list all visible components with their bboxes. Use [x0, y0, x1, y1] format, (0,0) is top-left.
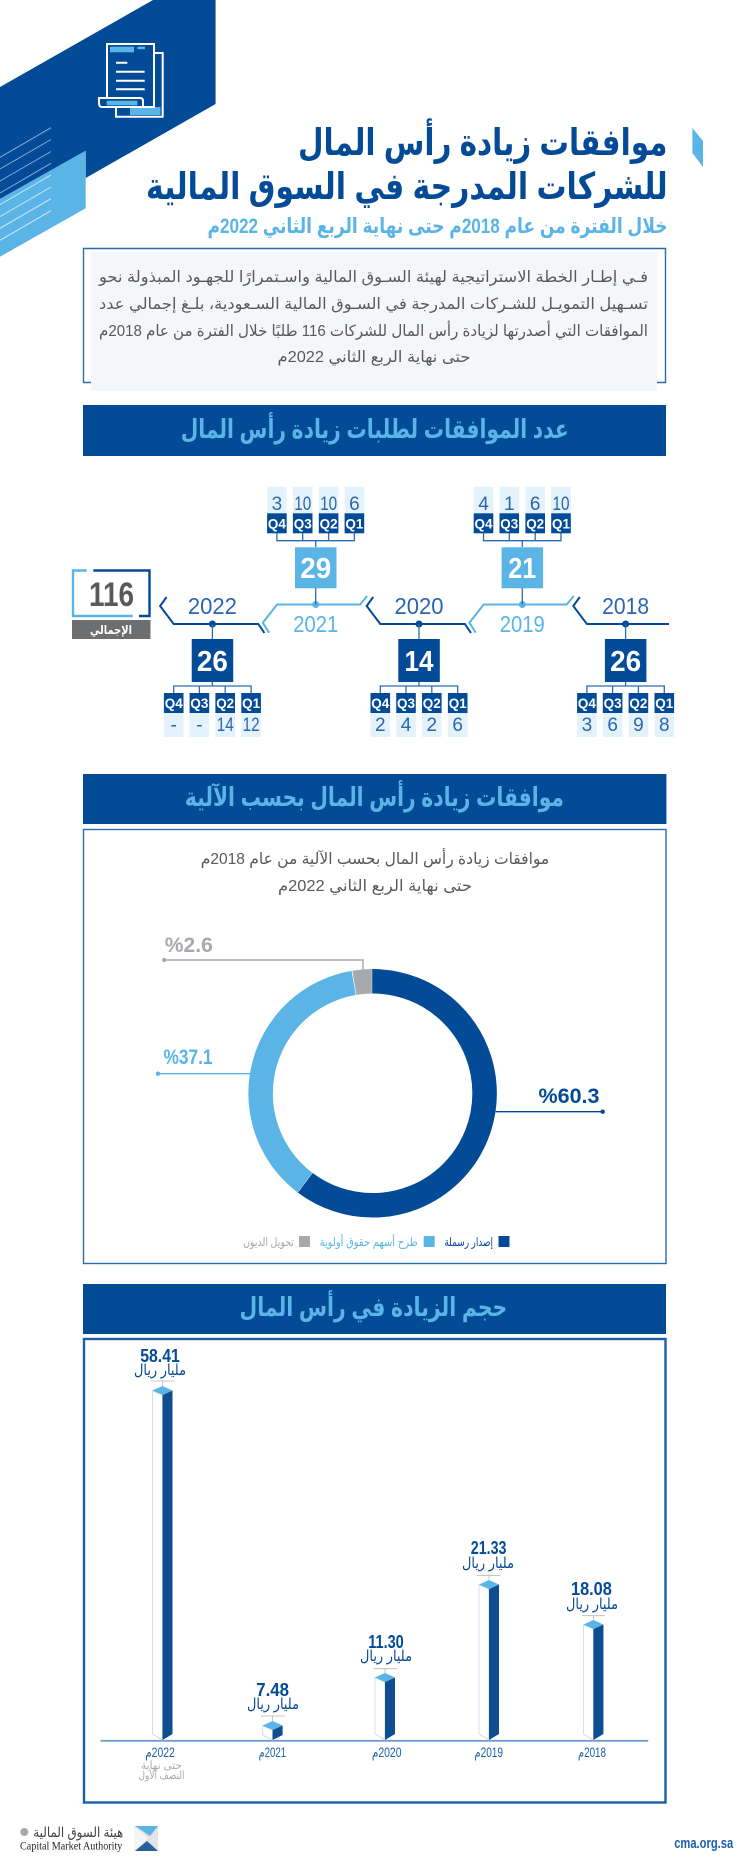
bar 2018	[566, 1579, 618, 1760]
timeline year 2022: Q3	[190, 695, 209, 711]
bar 2020	[360, 1632, 412, 1760]
timeline year 2021: Q3	[294, 516, 312, 532]
panel: intro text: فـي إطـار الخطة الاستراتيجية لهيئة السـوق المالية واسـتمرارًا للجهـود المبذولة نحو	[98, 269, 648, 287]
timeline year 2018: 9	[633, 715, 644, 736]
timeline year 2022: 2022	[188, 593, 237, 619]
panel: intro text: حتى نهاية الربع الثاني 2022م	[278, 349, 470, 367]
timeline year 2019: 1	[504, 494, 515, 515]
timeline year 2021	[263, 487, 367, 637]
bar 2022: 58.41	[140, 1346, 180, 1366]
timeline year 2022: 12	[243, 715, 260, 736]
panel: intro text: تسـهيل التمويـل للشـركات المدرجة في السـوق المالية السـعودية، بلـغ إجمالي عدد	[99, 296, 648, 314]
timeline year 2019: Q1	[552, 516, 570, 532]
timeline year 2018: Q4	[578, 695, 596, 711]
timeline year 2021: Q4	[268, 516, 286, 532]
timeline year 2019: 6	[530, 494, 540, 515]
timeline year 2018: Q1	[655, 695, 673, 711]
timeline year 2022	[160, 593, 264, 737]
timeline year 2020: 2	[427, 715, 437, 736]
callout 60.3	[496, 1085, 605, 1114]
panel: bar chart	[84, 1339, 666, 1802]
bar 2021: مليار ريال	[247, 1696, 299, 1713]
header decorative banner	[0, 0, 216, 257]
timeline year 2019: 10	[552, 494, 569, 515]
callout 2.6: %2.6	[165, 934, 213, 957]
logo wordmark: Capital Market Authority	[20, 1840, 123, 1852]
bar 2020: مليار ريال	[360, 1648, 412, 1665]
timeline year 2019: 4	[478, 494, 489, 515]
icon: document	[99, 44, 163, 117]
subtitle: خلال الفترة من عام 2018م حتى نهاية الربع الثاني 2022م	[207, 215, 668, 238]
timeline year 2019: Q3	[500, 516, 518, 532]
total 116: الإجمالي	[90, 623, 132, 637]
timeline year 2018: Q3	[604, 695, 622, 711]
bar 2022: النصف الأول	[138, 1768, 184, 1782]
heading: approvals count: عدد الموافقات لطلبات زيادة رأس المال	[181, 412, 569, 445]
bar 2019	[462, 1538, 514, 1760]
timeline year 2020: Q1	[449, 695, 467, 711]
timeline year 2019: 21	[508, 553, 536, 585]
callout 37.1	[156, 1046, 250, 1076]
bar 2018: 18.08	[571, 1579, 612, 1599]
timeline year 2018: 3	[582, 715, 592, 736]
timeline year 2018: 6	[607, 715, 618, 736]
timeline year 2021: 3	[272, 494, 282, 515]
bar 2018: مليار ريال	[566, 1596, 618, 1613]
timeline year 2020	[367, 593, 471, 737]
bar 2021: 2021م	[259, 1744, 286, 1760]
timeline year 2018: 2018	[602, 593, 649, 619]
bar 2019: 21.33	[471, 1538, 506, 1558]
legend	[243, 1234, 510, 1250]
bar 2020: 11.30	[368, 1632, 404, 1652]
timeline year 2021: Q2	[320, 516, 338, 532]
timeline year 2021: 6	[349, 494, 360, 515]
timeline year 2018: 26	[610, 646, 641, 678]
bar 2022: مليار ريال	[134, 1362, 186, 1379]
timeline year 2022: Q1	[242, 695, 260, 711]
timeline year 2022: 14	[217, 715, 234, 736]
legend: إصدار رسملة	[444, 1235, 493, 1250]
total 116: 116	[89, 576, 134, 614]
callout 37.1: %37.1	[164, 1046, 213, 1069]
bar 2022: حتى نهاية	[141, 1760, 182, 1772]
logo mark	[134, 1826, 158, 1851]
timeline year 2020: 2	[375, 715, 386, 736]
timeline year 2019: Q4	[474, 516, 493, 532]
timeline year 2021: Q1	[345, 516, 364, 532]
timeline year 2021: 29	[300, 553, 331, 585]
bar 2021	[247, 1680, 299, 1760]
timeline year 2020: 14	[404, 646, 434, 678]
axis	[101, 1740, 648, 1742]
chart subtitle: موافقات زيادة رأس المال بحسب الآلية من عام 2018م	[201, 848, 549, 869]
panel: intro text	[84, 248, 666, 391]
timeline year 2022: Q2	[216, 695, 234, 711]
logo wordmark: هيئة السوق المالية	[33, 1824, 123, 1841]
timeline year 2020: Q4	[371, 695, 389, 711]
timeline year 2021: 2021	[293, 611, 338, 637]
timeline year 2018: Q2	[629, 695, 648, 711]
timeline year 2018	[573, 593, 674, 737]
title: موافقات زيادة رأس المال	[298, 118, 667, 164]
timeline year 2020: 6	[452, 715, 463, 736]
bar 2021: 7.48	[256, 1680, 289, 1700]
donut chart	[261, 981, 485, 1205]
bar 2020: 2020م	[372, 1744, 402, 1760]
timeline year 2022: -	[171, 715, 177, 736]
heading: by mechanism	[83, 774, 666, 824]
timeline year 2022: Q4	[165, 695, 183, 711]
title	[146, 118, 668, 208]
timeline year 2019	[469, 487, 574, 637]
timeline year 2020: 4	[401, 715, 412, 736]
timeline year 2022: -	[196, 715, 203, 736]
timeline year 2019: Q2	[526, 516, 544, 532]
legend: طرح أسهم حقوق أولوية	[320, 1234, 418, 1250]
timeline year 2018: 8	[659, 715, 670, 736]
heading: increase volume	[83, 1284, 666, 1334]
timeline year 2020: Q2	[423, 695, 441, 711]
logo wordmark	[20, 1824, 123, 1852]
timeline year 2020: 2020	[394, 593, 444, 619]
bar 2022: 2022م	[145, 1744, 175, 1760]
timeline year 2021: 10	[294, 494, 311, 515]
legend: تحويل الديون	[243, 1235, 294, 1250]
chart subtitle	[201, 848, 549, 896]
timeline year 2020: Q3	[397, 695, 415, 711]
bar 2019: مليار ريال	[462, 1555, 514, 1572]
panel: mechanism donut	[84, 830, 666, 1264]
timeline year 2021: 10	[320, 494, 337, 515]
callout 2.6	[162, 934, 363, 970]
total 116	[72, 570, 150, 639]
heading: approvals count	[83, 405, 666, 456]
panel: intro text: الموافقات التي أصدرتها لزيادة رأس المال للشركات 116 طلبًا خلال الفترة من عام 2018م	[99, 320, 648, 341]
chart subtitle: حتى نهاية الربع الثاني 2022م	[278, 878, 472, 896]
heading: increase volume: حجم الزيادة في رأس المال	[240, 1290, 507, 1323]
bar 2022	[134, 1346, 186, 1782]
timeline year 2019: 2019	[500, 611, 545, 637]
bar 2019: 2019م	[474, 1744, 503, 1760]
callout 60.3: %60.3	[538, 1085, 600, 1108]
timeline year 2022: 26	[197, 646, 228, 678]
title accent	[692, 128, 703, 167]
bar 2018: 2018م	[578, 1744, 606, 1760]
heading: by mechanism: موافقات زيادة رأس المال بحسب الآلية	[185, 780, 564, 813]
